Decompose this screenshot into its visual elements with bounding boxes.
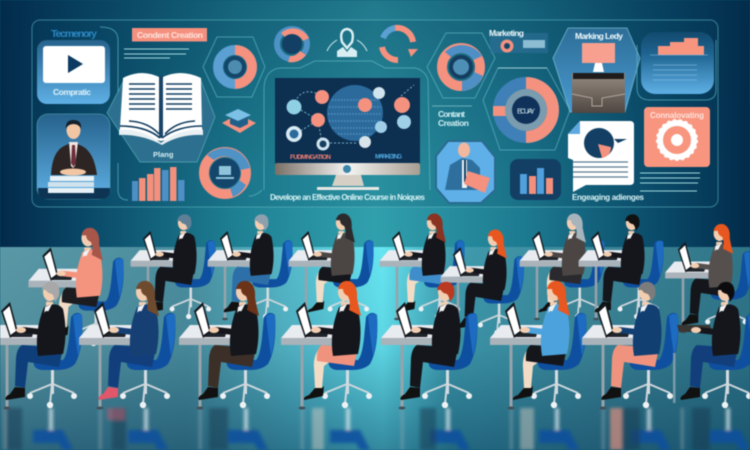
panel: marketing card: Marketing [489,28,524,38]
person: back row 6 [441,230,524,336]
person: front row 4 [281,281,377,410]
person: front row 7 [582,282,678,410]
person: front row 8, flat laptop and no desk panel [673,282,750,408]
panel: marketing card [489,28,548,53]
icon: top donut [277,28,309,62]
panel: hexagon donut [203,37,265,97]
floor reflections [4,408,750,450]
person: back row 2 [131,214,216,320]
monitor: MARKETING [375,154,402,160]
people: back row [28,214,750,347]
person: back row 7 [520,214,605,320]
icon: briefcase [572,73,625,113]
video tile [37,40,110,104]
person: front row 6 [490,281,586,410]
panel: planning hexagon with book: Plang [153,150,174,159]
person: back row 5 [380,214,465,320]
panel: technology column [37,27,128,200]
person: back row 4 [289,214,374,320]
icon: open book [119,73,203,145]
panel: large donut hexagon: ECUAY [517,108,535,116]
caption: engaging audiences: Engeaging adienges [572,193,645,202]
video tile: Compratic [53,87,91,97]
icon: graduation cap [222,109,256,133]
person: back row 3 [208,214,293,320]
monitor [275,78,420,190]
panel: marking lady hexagon [553,28,640,113]
icon: pie [584,128,627,158]
heading: content creation right: Creation [438,118,469,128]
icon: presenter octagon [436,141,495,203]
icon: laptop donut [204,148,250,197]
heading: content creation right [432,106,472,128]
panel: skyline tile [637,32,716,100]
person: front row 2 [79,281,175,410]
person: front row 1 [0,282,82,410]
caption: Develope an Effective Online Course in Noiques [270,193,426,202]
chart: bar chart left [132,167,184,201]
monitor: FUDMNGATION [290,154,331,161]
chart: bar chart tile [510,159,561,200]
globe [327,85,383,141]
presenter tile [37,114,110,199]
panel: monitor frame [249,61,430,196]
panel: collaborating tile: Connalovating [650,111,704,120]
heading: content creation right: Contant [438,109,465,119]
network nodes [286,85,414,150]
panel: document [568,121,634,192]
person: back row 8 [579,214,664,320]
heading label: content creation: Condent Creation [137,30,203,40]
panel: marking lady hexagon: Marking Ledy [575,31,623,41]
person: front row 5 [381,282,477,410]
panel: large donut hexagon [483,68,570,150]
person: back row 1 [28,228,124,347]
background wall [0,0,750,248]
icon: monitor [582,43,615,72]
icon: target gear [657,120,697,160]
dashboard outer frame [32,20,718,207]
icon: location pin [327,29,367,57]
panel: right hexagon donut [427,33,495,98]
reflective floor [0,247,750,450]
icon: cycle arrows [382,28,418,60]
panel: planning hexagon with book [107,73,215,162]
person: front row 3 [179,281,275,410]
panel: collaborating tile [644,107,710,167]
heading: technology: Tecmenory [51,28,97,40]
heading label: content creation [132,28,207,42]
person: back row 9 [665,224,750,333]
text lines [640,173,700,191]
text lines [124,49,189,58]
people: front row [0,281,750,410]
